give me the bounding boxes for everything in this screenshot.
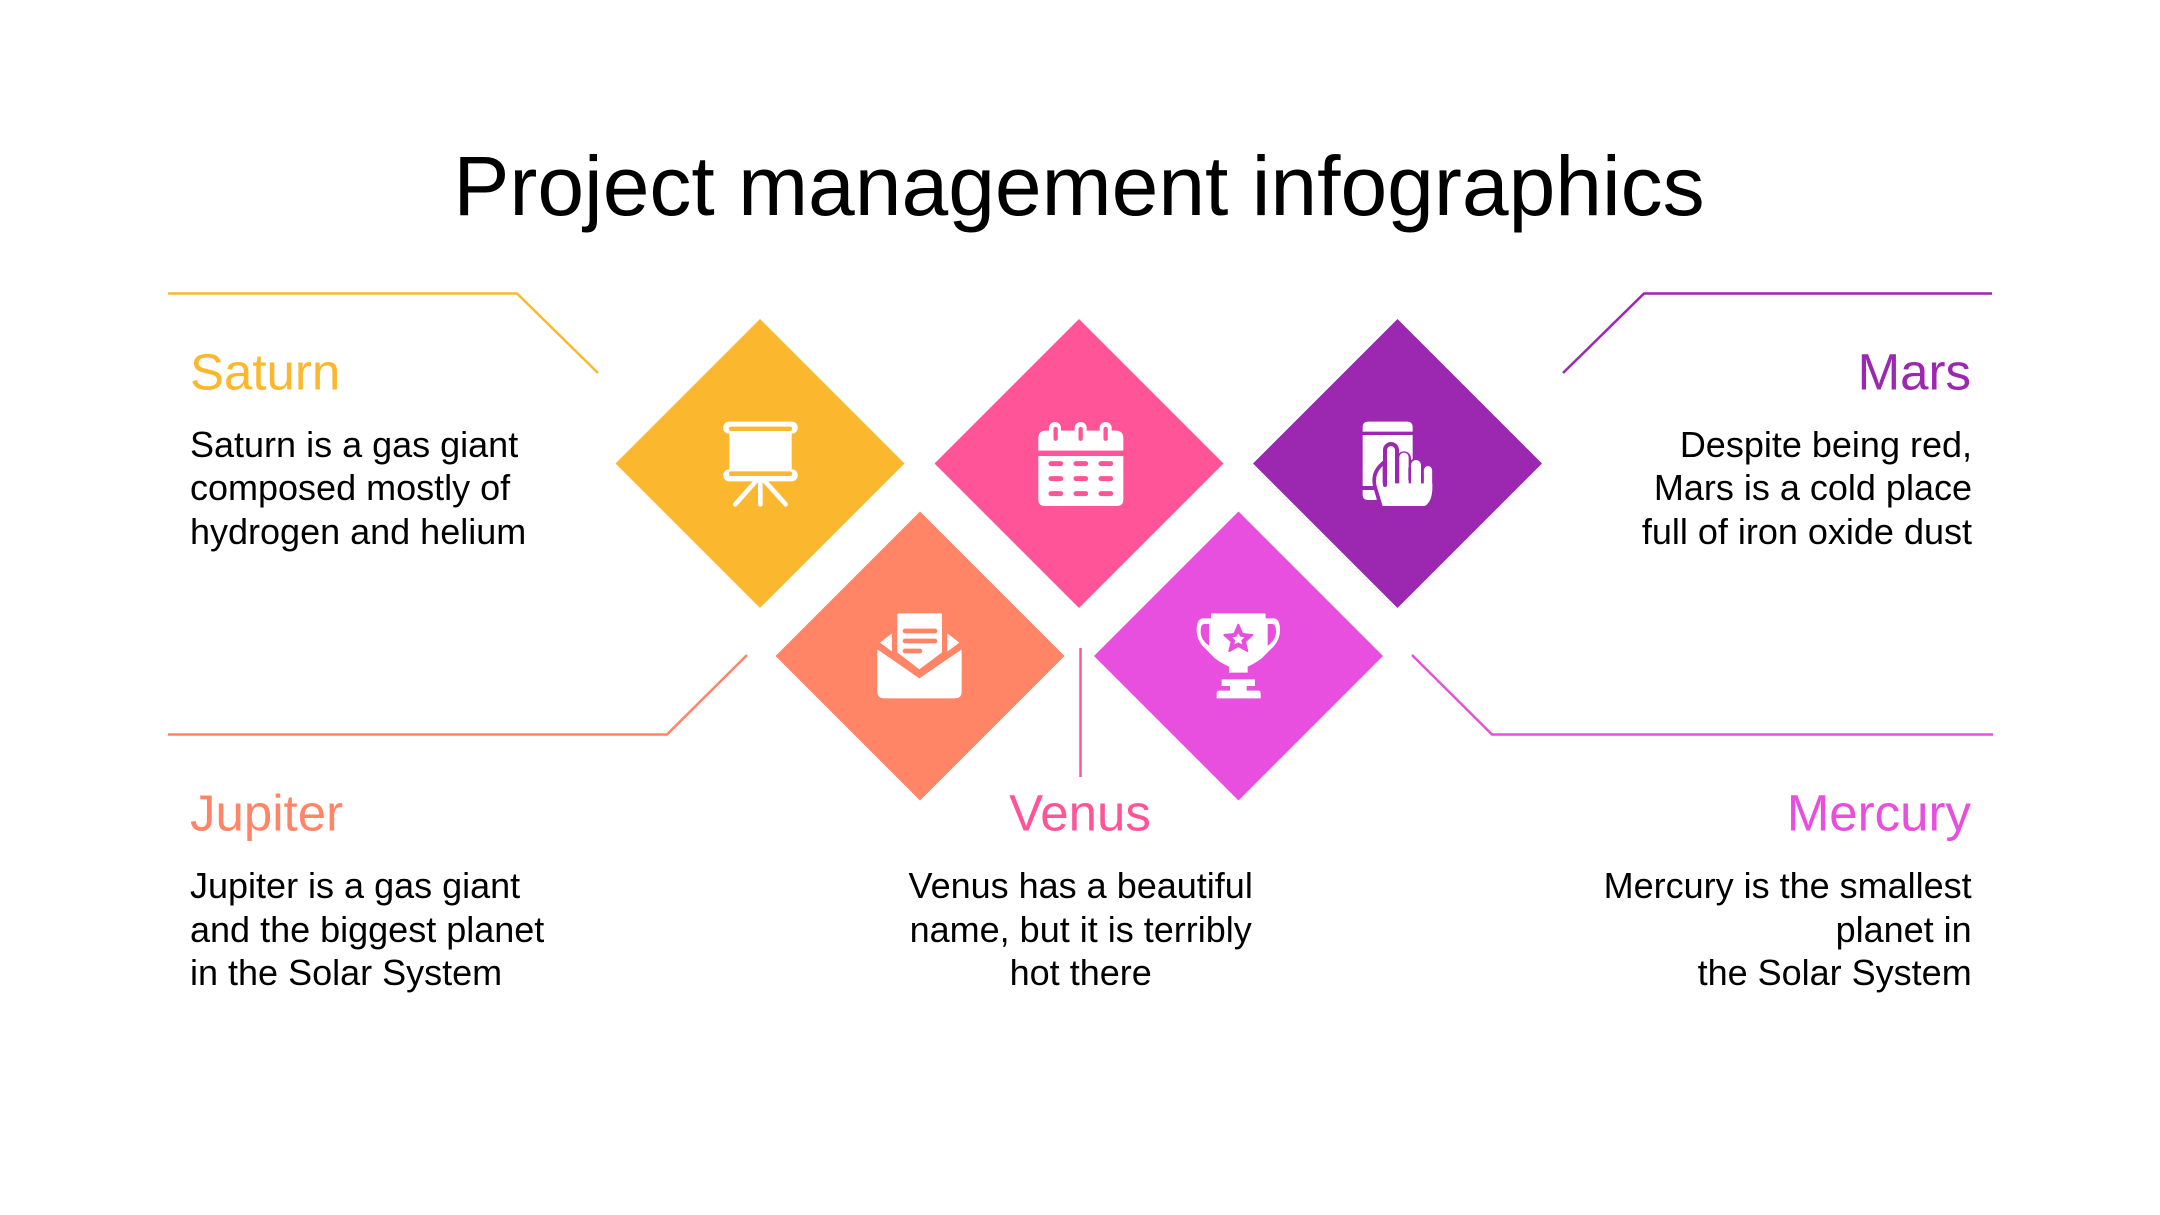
text: Venus description: Venus has a beautiful: [909, 865, 1253, 906]
text: Mercury description: the Solar System: [1698, 952, 1972, 993]
icon: presentation board: [723, 422, 798, 504]
text: Mars description: Despite being red,: [1680, 424, 1972, 465]
diamond: Venus: [934, 319, 1224, 608]
block: Mars: [1642, 344, 1972, 552]
text: Venus description: hot there: [1010, 952, 1152, 993]
block: Mercury: [1604, 784, 1972, 993]
icon: calendar: [1038, 422, 1123, 506]
icon: touch phone: [1363, 422, 1432, 506]
text: Venus description: name, but it is terribly: [910, 909, 1252, 950]
connector: Venus: [1079, 648, 1082, 777]
text: Saturn description: composed mostly of: [190, 467, 511, 508]
text: Jupiter description: Jupiter is a gas giant: [190, 865, 520, 906]
text: Mars description: full of iron oxide dust: [1642, 511, 1972, 552]
text: Mercury description: Mercury is the smallest: [1604, 865, 1972, 906]
heading: Jupiter: Jupiter: [190, 784, 343, 842]
text: Jupiter description: in the Solar System: [190, 952, 502, 993]
connector: Mars: [1563, 294, 1992, 373]
diamond: Mercury: [1094, 512, 1383, 800]
connector: Saturn: [168, 294, 598, 373]
diamond: Jupiter: [776, 512, 1064, 800]
heading: Mercury: Mercury: [1787, 784, 1971, 842]
text: Mars description: Mars is a cold place: [1654, 467, 1972, 508]
icon: trophy: [1197, 613, 1280, 698]
text: Mercury description: planet in: [1836, 909, 1972, 950]
text: Saturn description: hydrogen and helium: [190, 511, 526, 552]
block: Jupiter: [190, 784, 544, 993]
connector: Jupiter: [168, 655, 747, 734]
heading: Mars: Mars: [1858, 344, 1971, 400]
connector: Mercury: [1412, 655, 1993, 734]
block: Saturn: [190, 344, 526, 552]
title: Project management infographics: [453, 139, 1705, 233]
text: Jupiter description: and the biggest planet: [190, 909, 544, 950]
text: Saturn description: Saturn is a gas giant: [190, 424, 518, 465]
diamond: Saturn: [616, 319, 904, 608]
heading: Saturn: Saturn: [190, 344, 340, 400]
diamond: Mars: [1253, 319, 1542, 608]
block: Venus: [909, 784, 1253, 993]
heading: Venus: Venus: [1009, 784, 1151, 842]
icon: open envelope: [877, 613, 962, 698]
